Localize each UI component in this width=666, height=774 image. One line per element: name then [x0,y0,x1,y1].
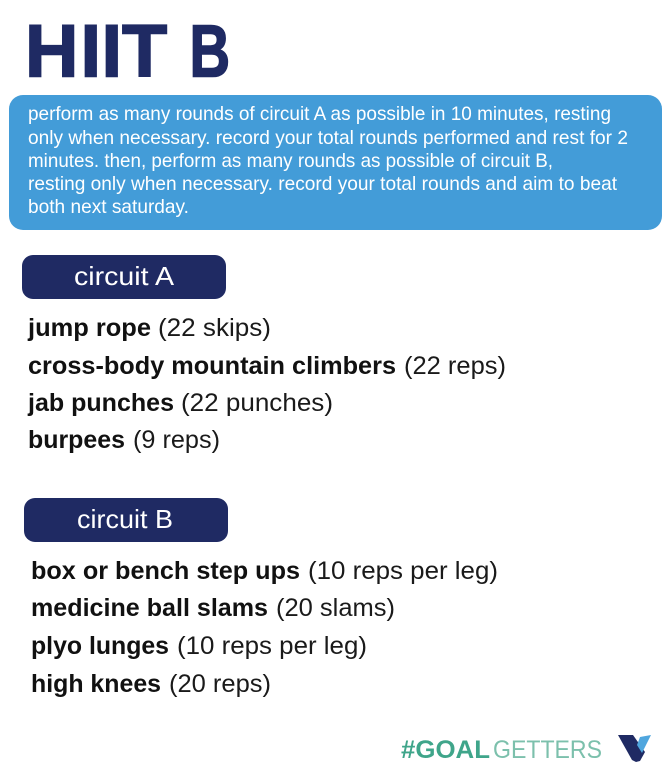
panel: instructions: both next saturday. [28,196,189,218]
heading: circuit A: circuit A [74,261,175,291]
title: HIIT [25,10,167,92]
list: circuit B exercises: (20 slams) [276,594,395,622]
list: circuit B exercises: plyo lunges [31,632,169,660]
panel: instructions: only when necessary. record your total rounds performed and rest for 2 [28,127,628,149]
list: circuit B exercises [31,557,498,698]
list: circuit B exercises: (10 reps per leg) [308,557,498,585]
list: circuit B exercises: box or bench step ups [31,557,300,585]
list: circuit A exercises: jump rope [27,314,151,342]
panel: instructions: minutes. then, perform as many rounds as possible of circuit B, [28,150,553,172]
heading: circuit B [24,498,228,542]
list: circuit B exercises: high knees [31,670,161,698]
hashtag: goalgetters: GETTERS [493,736,602,764]
title [25,10,230,92]
hashtag: goalgetters: #GOAL [401,736,490,764]
list: circuit A exercises: (22 skips) [158,314,271,342]
heading: circuit B: circuit B [77,504,173,534]
title: B [190,10,230,92]
list: circuit A exercises [27,314,506,454]
panel: instructions: resting only when necessary. record your total rounds and aim to beat [28,173,618,195]
list: circuit B exercises: (20 reps) [169,670,271,698]
icon: V logo [618,735,651,762]
list: circuit A exercises: (22 reps) [404,352,506,380]
panel: instructions [9,95,662,230]
list: circuit B exercises: medicine ball slams [31,594,268,622]
list: circuit A exercises: jab punches [27,389,174,417]
list: circuit A exercises: cross-body mountain climbers [28,352,396,380]
list: circuit A exercises: (22 punches) [181,389,333,417]
list: circuit A exercises: burpees [28,426,125,454]
heading: circuit A [22,255,226,299]
list: circuit B exercises: (10 reps per leg) [177,632,367,660]
list: circuit A exercises: (9 reps) [133,426,220,454]
panel: instructions: perform as many rounds of circuit A as possible in 10 minutes, resting [28,103,611,125]
hashtag: goalgetters [401,736,602,764]
